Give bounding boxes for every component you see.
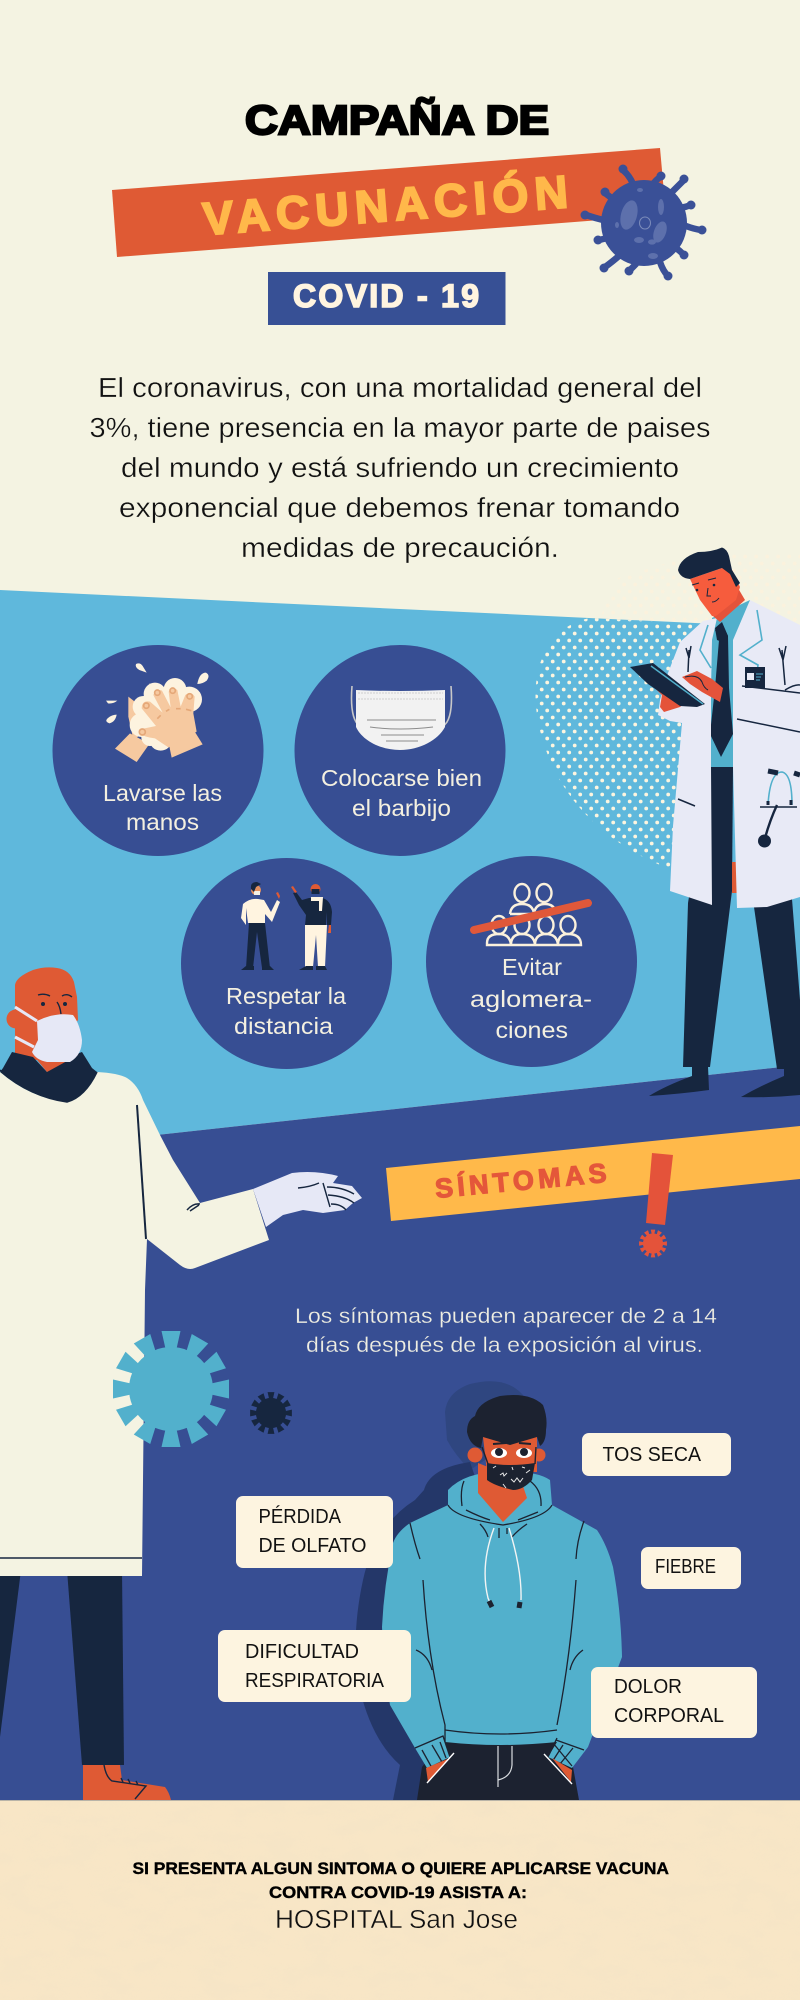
shoe <box>83 1765 171 1800</box>
text block: symptoms intro <box>295 1304 717 1357</box>
face mask <box>482 1447 536 1490</box>
icon: surgical mask <box>352 686 452 750</box>
panel: dark blue symptoms section <box>0 1065 800 1800</box>
icon: two people apart <box>241 882 332 970</box>
label: evitar aglomeraciones: ciones <box>496 1017 568 1043</box>
eyes <box>491 1443 532 1458</box>
text block: intro paragraph: 3%, tiene presencia en la mayor parte de paises <box>90 412 710 443</box>
pockets and creases <box>678 646 800 806</box>
text block: hospital name: HOSPITAL San Jose <box>275 1906 518 1934</box>
hoodie seams <box>410 1481 584 1768</box>
banner: vacunación <box>112 148 666 257</box>
drawstrings <box>485 1528 521 1608</box>
badge <box>745 667 765 688</box>
label: respetar la distancia: distancia <box>234 1013 333 1039</box>
label: respetar la distancia: Respetar la <box>226 983 346 1009</box>
icon: small dark virus <box>250 1392 292 1434</box>
icon: exclamation mark with virus dot <box>639 1153 673 1257</box>
dotted blob behind doctor <box>536 618 720 870</box>
label: respetar la distancia <box>226 983 346 1039</box>
head <box>15 967 78 1060</box>
mask <box>15 1007 82 1062</box>
tablet <box>630 663 705 707</box>
label: tos seca <box>582 1433 731 1476</box>
text block: intro paragraph: medidas de precaución. <box>241 532 559 563</box>
banner: vacunación: VACUNACIÓN <box>201 165 570 245</box>
label: pérdida de olfato <box>236 1496 393 1568</box>
illustration: man with mask pointing <box>0 967 362 1800</box>
text block: intro paragraph <box>90 372 710 563</box>
left hand under tablet <box>647 681 690 712</box>
text block: intro paragraph: El coronavirus, con una mortalidad general del <box>98 372 702 403</box>
text block: footer call to action <box>132 1859 669 1902</box>
label: pérdida de olfato: DE OLFATO <box>258 1534 366 1557</box>
text block: footer call to action: SI PRESENTA ALGUN SINTOMA O QUIERE APLICARSE VACUNA <box>132 1859 669 1878</box>
panel: light blue prevention section <box>0 590 800 1152</box>
label: colocarse bien el barbijo: Colocarse bien <box>321 765 482 791</box>
panel: footer <box>0 1800 800 2000</box>
panel: colocarse bien el barbijo <box>294 645 506 856</box>
panel: lavarse las manos <box>52 645 264 856</box>
label: fiebre: FIEBRE <box>655 1555 716 1578</box>
tie <box>710 623 733 757</box>
hoodie <box>382 1472 622 1768</box>
icon: crowd crossed out <box>474 884 588 945</box>
text block: symptoms intro: días después de la exposición al virus. <box>306 1333 703 1357</box>
trousers <box>0 1570 21 1737</box>
panel: respetar la distancia <box>181 858 392 1069</box>
hair <box>467 1395 547 1448</box>
head <box>678 548 745 622</box>
coat left panel <box>658 618 717 905</box>
label: pérdida de olfato: PÉRDIDA <box>258 1505 341 1528</box>
right hand <box>682 671 723 702</box>
text block: intro paragraph: del mundo y está sufriendo un crecimiento <box>121 452 679 483</box>
label: colocarse bien el barbijo <box>321 765 482 821</box>
shirt <box>710 600 752 767</box>
panel: evitar aglomeraciones <box>426 856 637 1067</box>
label: dificultad respiratoria: RESPIRATORIA <box>245 1669 384 1692</box>
label: evitar aglomeraciones: Evitar <box>502 954 562 980</box>
icon: washing hands <box>106 663 209 762</box>
coat right panel <box>733 600 800 908</box>
legs <box>753 899 800 1069</box>
banner: síntomas: SÍNTOMAS <box>434 1157 608 1204</box>
icon: turquoise virus <box>113 1331 229 1447</box>
label: lavarse las manos: Lavarse las <box>103 780 222 806</box>
label: dificultad respiratoria: DIFICULTAD <box>245 1640 359 1663</box>
badge: covid 19: COVID - 19 <box>293 278 479 314</box>
lapels <box>700 610 762 674</box>
text block: footer call to action: CONTRA COVID-19 ASISTA A: <box>269 1883 527 1902</box>
label: lavarse las manos: manos <box>126 809 199 835</box>
label: evitar aglomeraciones: aglomera- <box>470 986 592 1012</box>
text block: intro paragraph: exponencial que debemos frenar tomando <box>119 492 680 523</box>
collar <box>0 1052 97 1102</box>
label: colocarse bien el barbijo: el barbijo <box>352 795 451 821</box>
illustration: shadow behind young man <box>356 1381 523 1800</box>
banner: síntomas <box>386 1126 800 1221</box>
panel: faint dots above blue section <box>600 552 800 640</box>
coat and sleeve <box>0 1072 269 1576</box>
glove <box>253 1172 362 1227</box>
hands in pockets <box>426 1758 450 1782</box>
label: lavarse las manos <box>103 780 222 835</box>
shirt over coat edge and tie knot <box>715 622 728 642</box>
neck <box>478 1463 527 1522</box>
shoes <box>649 1066 709 1096</box>
label: dolor corporal: DOLOR <box>614 1675 682 1698</box>
label: tos seca: TOS SECA <box>602 1443 701 1466</box>
badge: covid 19 <box>268 272 506 325</box>
label: dolor corporal <box>591 1667 757 1738</box>
title: campaña de: CAMPAÑA DE <box>245 97 549 143</box>
trousers <box>417 1738 579 1800</box>
label: dolor corporal: CORPORAL <box>614 1704 724 1727</box>
illustration: doctor with tablet <box>630 548 800 1097</box>
icon: navy virus <box>580 164 706 280</box>
label: evitar aglomeraciones <box>470 954 592 1043</box>
stethoscope <box>758 771 800 848</box>
text block: symptoms intro: Los síntomas pueden aparecer de 2 a 14 <box>295 1304 717 1328</box>
label: dificultad respiratoria <box>218 1630 411 1702</box>
illustration: young man in hoodie <box>382 1395 622 1800</box>
label: fiebre <box>641 1547 741 1589</box>
ears and face <box>468 1448 482 1462</box>
